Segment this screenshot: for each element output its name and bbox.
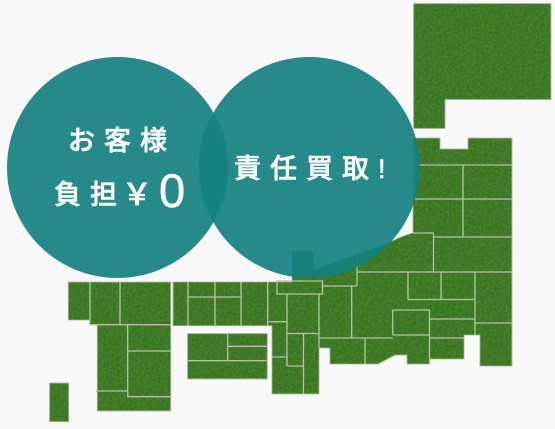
region: Kyushu	[68, 282, 171, 411]
region: Shikoku	[187, 334, 268, 379]
heading: 責任買取!: 責任買取!	[234, 154, 395, 184]
circle: responsible purchase	[199, 57, 420, 278]
region: Okinawa	[50, 383, 69, 422]
yen zero amount	[122, 164, 185, 217]
heading: お客様: お客様	[68, 126, 176, 156]
circle: customer pays nothing	[7, 57, 228, 278]
yen zero amount: ￥	[122, 179, 152, 212]
region: Hokkaido	[414, 4, 551, 128]
heading: 負担¥0: 負担	[54, 180, 126, 210]
region: Honshu	[173, 138, 512, 394]
yen zero amount: 0	[159, 164, 185, 217]
